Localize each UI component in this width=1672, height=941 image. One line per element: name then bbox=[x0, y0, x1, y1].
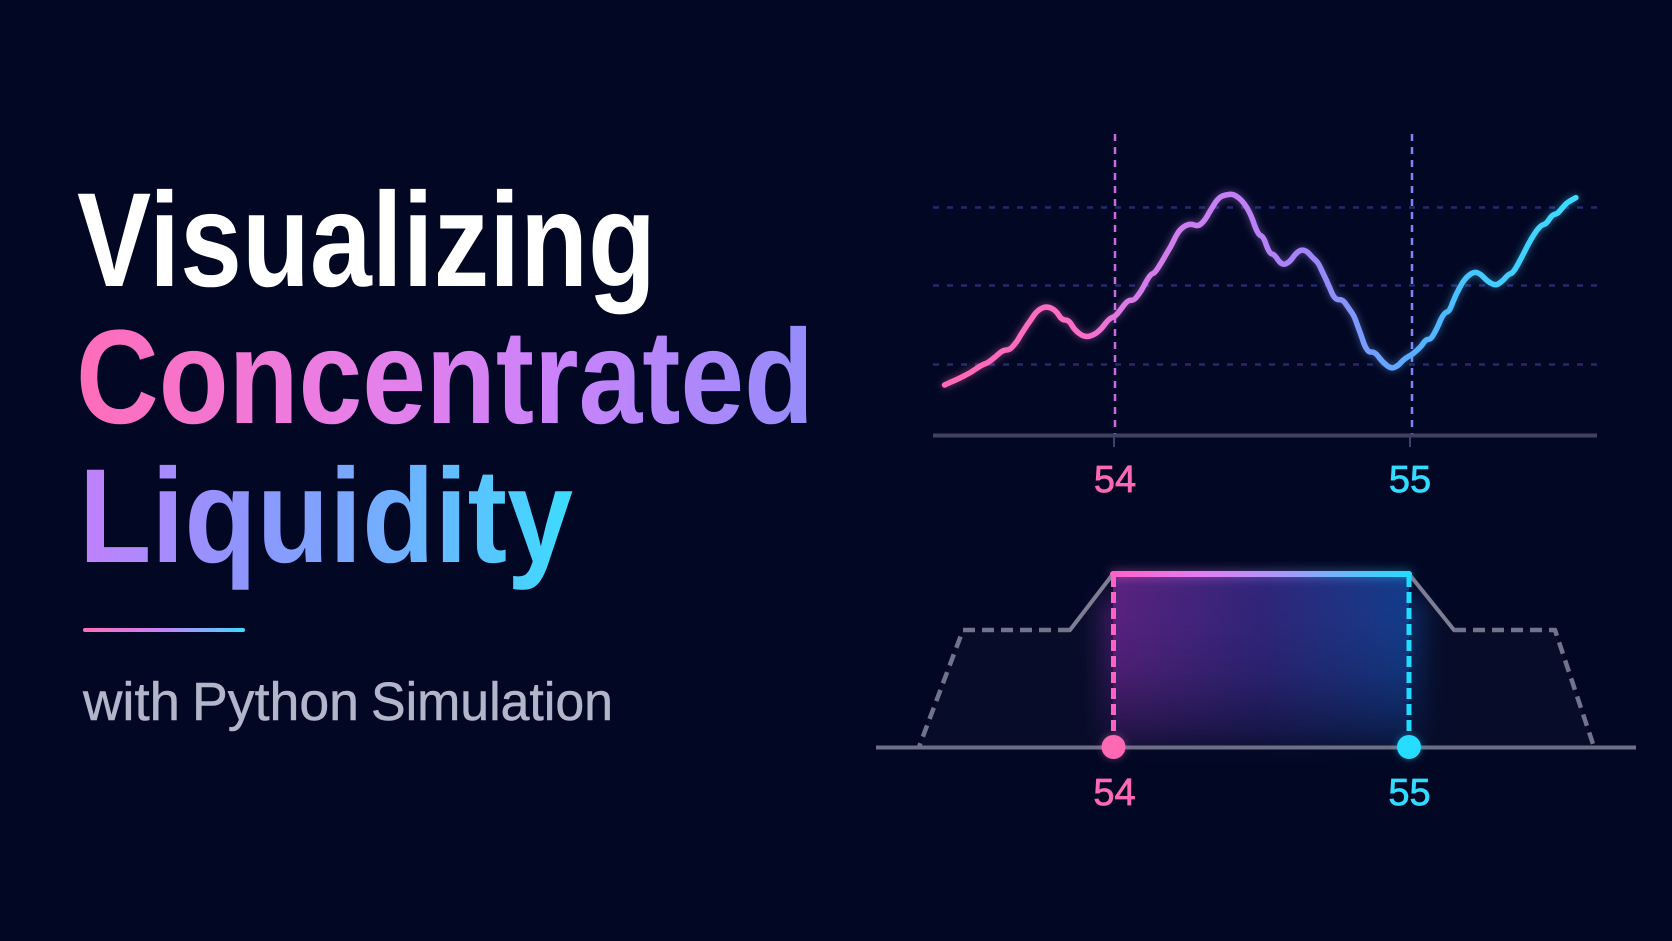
title line: Liquidity: Liquidity bbox=[79, 442, 573, 591]
axis ticks bbox=[1114, 436, 1410, 447]
solid side slopes bbox=[1070, 574, 1454, 630]
cyan dashed drop line bbox=[1406, 576, 1412, 735]
area side glow bbox=[1100, 600, 1422, 747]
top range line bbox=[1113, 571, 1409, 577]
concentrated liquidity area bbox=[1100, 574, 1422, 747]
vertical marker at 55 bbox=[1411, 134, 1413, 435]
subtitle bbox=[82, 672, 613, 732]
price chart bbox=[933, 134, 1597, 501]
dashed wide-range outline right bbox=[1454, 630, 1594, 747]
subtitle word: with: with bbox=[82, 672, 180, 732]
pink dashed drop line bbox=[1111, 576, 1116, 735]
label: 55 lower: 55 bbox=[1388, 772, 1431, 814]
area body bbox=[1113, 574, 1409, 747]
dashed wide-range outline left bbox=[919, 630, 1070, 747]
subtitle word: Python: Python bbox=[192, 672, 359, 732]
cyan marker dot bbox=[1397, 735, 1421, 759]
pink marker dot bbox=[1102, 735, 1126, 759]
label: 54 upper: 54 bbox=[1094, 459, 1136, 501]
subtitle word: Simulation: Simulation bbox=[371, 672, 613, 732]
label: 54 lower: 54 bbox=[1093, 772, 1136, 814]
vertical marker at 54 bbox=[1114, 134, 1116, 435]
title line: Concentrated: Concentrated bbox=[76, 303, 814, 452]
label: 55 upper: 55 bbox=[1389, 459, 1431, 501]
x axis bbox=[933, 434, 1597, 438]
infographic canvas bbox=[78, 134, 1636, 806]
divider rule bbox=[83, 628, 245, 632]
title line: Visualizing: Visualizing bbox=[77, 166, 656, 315]
chart grid lines bbox=[933, 208, 1597, 364]
title block bbox=[76, 166, 814, 591]
price curve bbox=[945, 194, 1576, 385]
baseline bbox=[876, 746, 1636, 750]
liquidity chart bbox=[876, 574, 1636, 814]
faint liquidity trapezoid fill bbox=[919, 574, 1594, 747]
